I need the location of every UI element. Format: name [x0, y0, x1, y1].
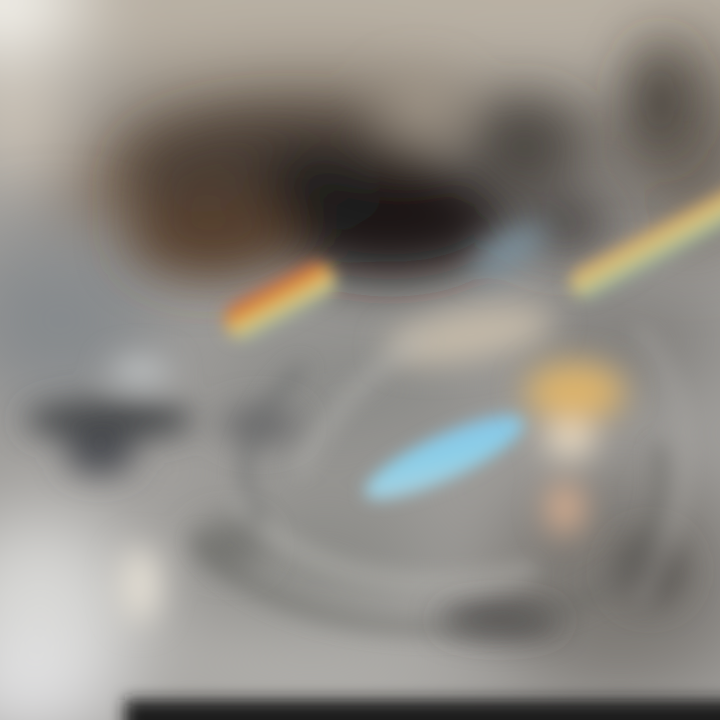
- rainbow streak left: [218, 256, 342, 346]
- blue light streak: [356, 400, 534, 514]
- rainbow streak right: [564, 182, 720, 304]
- bottom dark strip: [125, 700, 720, 720]
- orange and peach glow: [525, 362, 625, 534]
- dark central mass: [130, 45, 682, 280]
- left and lower smudges: [25, 297, 685, 634]
- upper tones: [0, 0, 720, 250]
- lower tones: [0, 235, 720, 720]
- swirl strokes: [200, 330, 685, 628]
- pale blue streak upper: [467, 218, 553, 282]
